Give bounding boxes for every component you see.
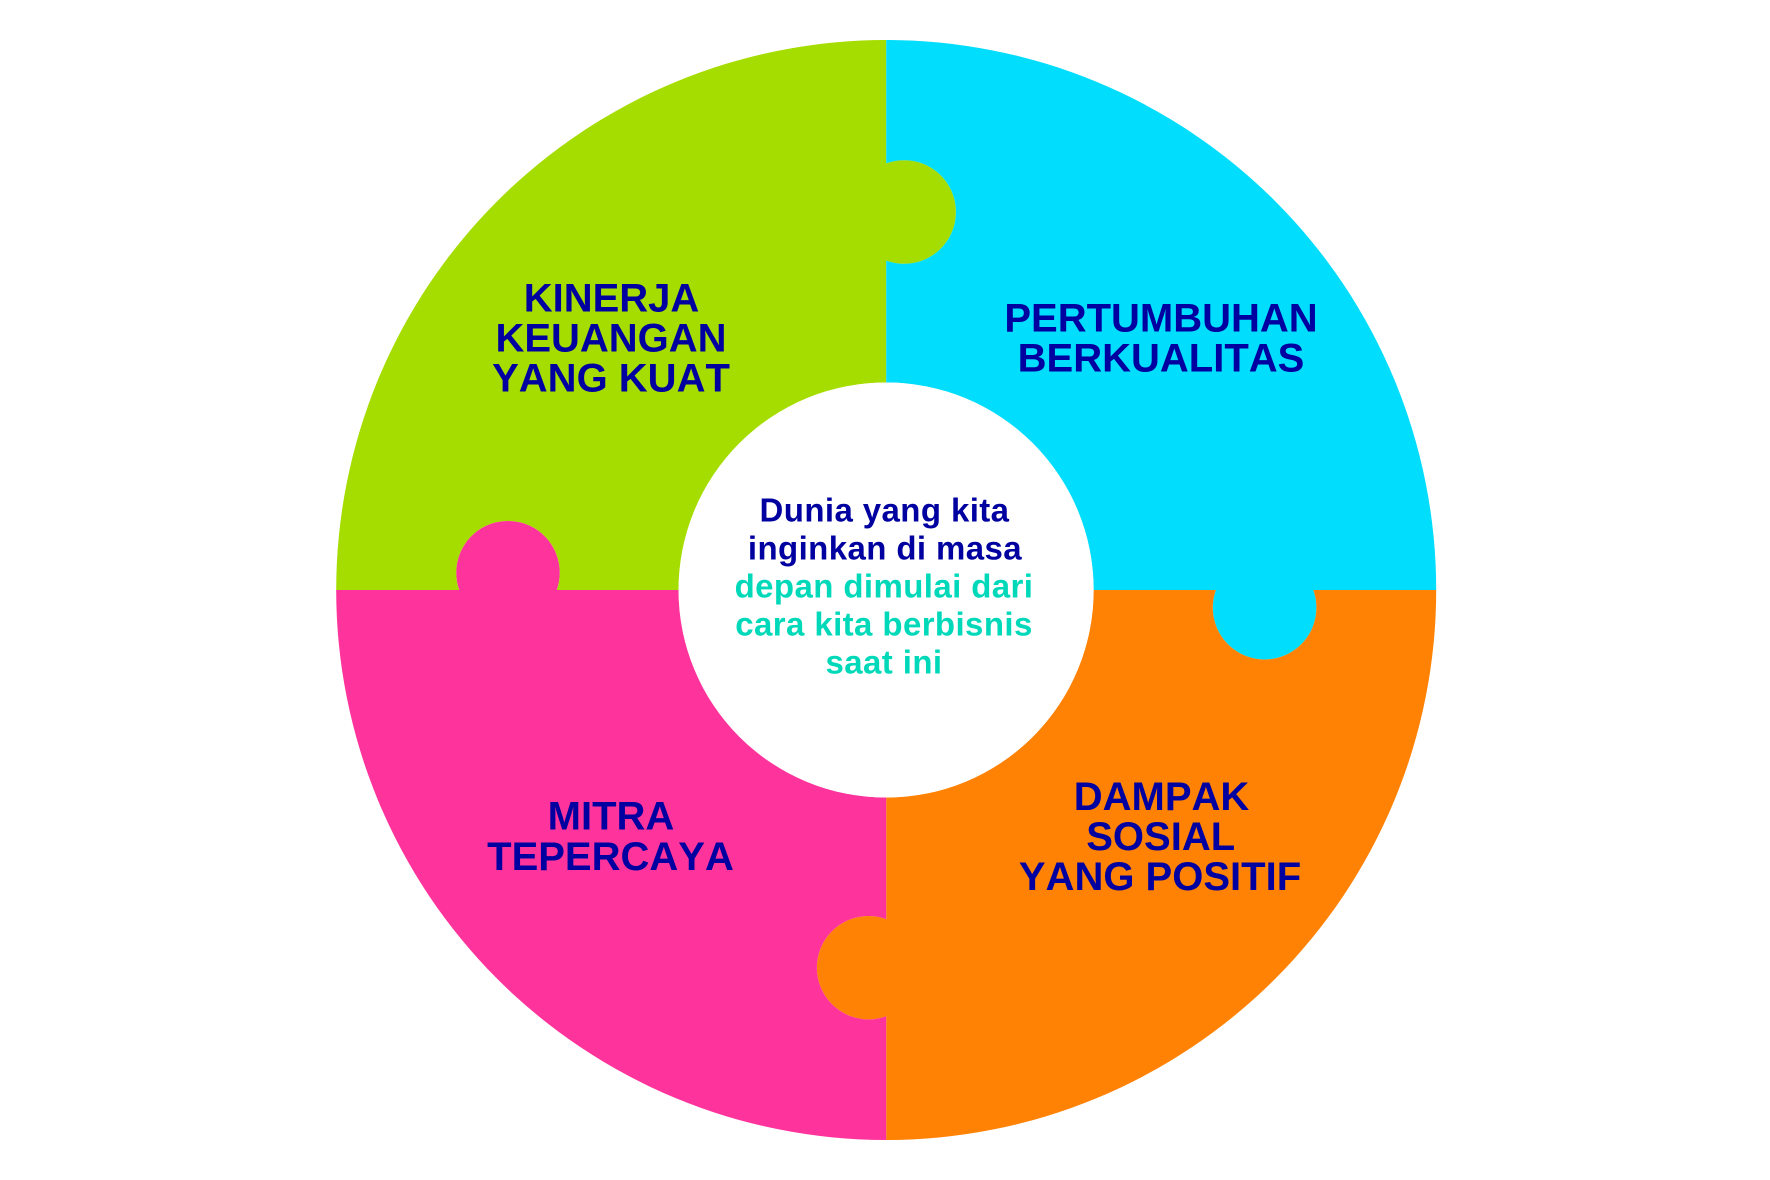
center text: depan dimulai dari: [735, 568, 1033, 605]
center text: saat ini: [826, 644, 942, 681]
cyan puzzle piece: [886, 40, 1436, 659]
heading: dampak sosial yang positif: YANG POSITIF: [1019, 855, 1301, 899]
panel: mitra tepercaya (pink piece): [336, 521, 886, 1140]
center text: Dunia yang kita: [760, 492, 1010, 529]
pink puzzle piece: [336, 521, 886, 1140]
heading: dampak sosial yang positif: DAMPAK: [1074, 775, 1249, 819]
center text: cara kita berbisnis: [735, 606, 1033, 643]
panel: center message: [678, 382, 1094, 798]
heading: mitra tepercaya: MITRA: [548, 794, 674, 838]
panel: kinerja keuangan (lime piece): [336, 40, 956, 590]
heading: pertumbuhan berkualitas: BERKUALITAS: [1018, 337, 1304, 381]
heading: kinerja keuangan yang kuat: YANG KUAT: [492, 357, 730, 401]
heading: kinerja keuangan yang kuat: KINERJA: [524, 277, 699, 321]
heading: mitra tepercaya: TEPERCAYA: [487, 835, 734, 879]
panel: dampak sosial (orange piece): [817, 590, 1436, 1140]
heading: dampak sosial yang positif: SOSIAL: [1086, 815, 1235, 859]
center text: inginkan di masa: [748, 530, 1022, 567]
heading: pertumbuhan berkualitas: PERTUMBUHAN: [1004, 297, 1318, 341]
center white circle: [678, 382, 1094, 798]
orange puzzle piece: [817, 590, 1436, 1140]
heading: kinerja keuangan yang kuat: KEUANGAN: [495, 317, 727, 361]
panel: pertumbuhan berkualitas (cyan piece): [886, 40, 1436, 659]
lime puzzle piece: [336, 40, 956, 590]
